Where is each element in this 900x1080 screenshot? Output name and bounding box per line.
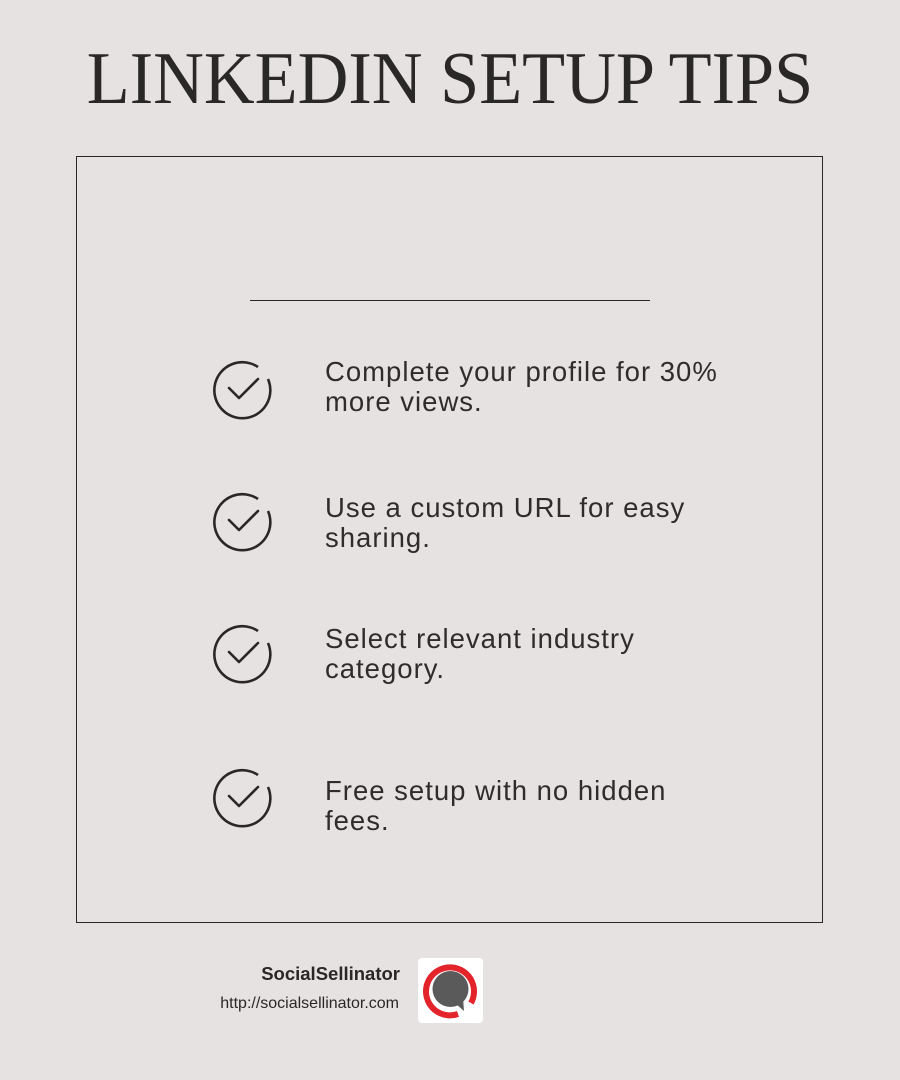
icon: check circle (213, 492, 272, 552)
text: Select relevant industry (325, 623, 635, 654)
text (325, 775, 666, 836)
text: sharing. (325, 522, 431, 553)
text: more views. (325, 386, 483, 417)
icon: check circle (213, 768, 272, 828)
text (325, 356, 718, 417)
text (325, 623, 635, 684)
icon: check circle (213, 360, 272, 420)
tip 4 (213, 768, 666, 836)
text: Use a custom URL for easy (325, 492, 685, 523)
tip 3 (213, 623, 635, 684)
text: Free setup with no hidden (325, 775, 666, 806)
tip 2 (213, 492, 685, 553)
text: fees. (325, 805, 390, 836)
icon: check circle (213, 624, 272, 684)
icon: logo (418, 958, 483, 1023)
text: category. (325, 653, 445, 684)
url: http://socialsellinator.com (220, 995, 399, 1012)
text: Complete your profile for 30% (325, 356, 718, 387)
brand name: SocialSellinator (261, 963, 400, 984)
panel: tips box (76, 156, 823, 923)
title: LINKEDIN SETUP TIPS (87, 38, 813, 120)
tip 1 (213, 356, 718, 420)
text (325, 492, 685, 553)
